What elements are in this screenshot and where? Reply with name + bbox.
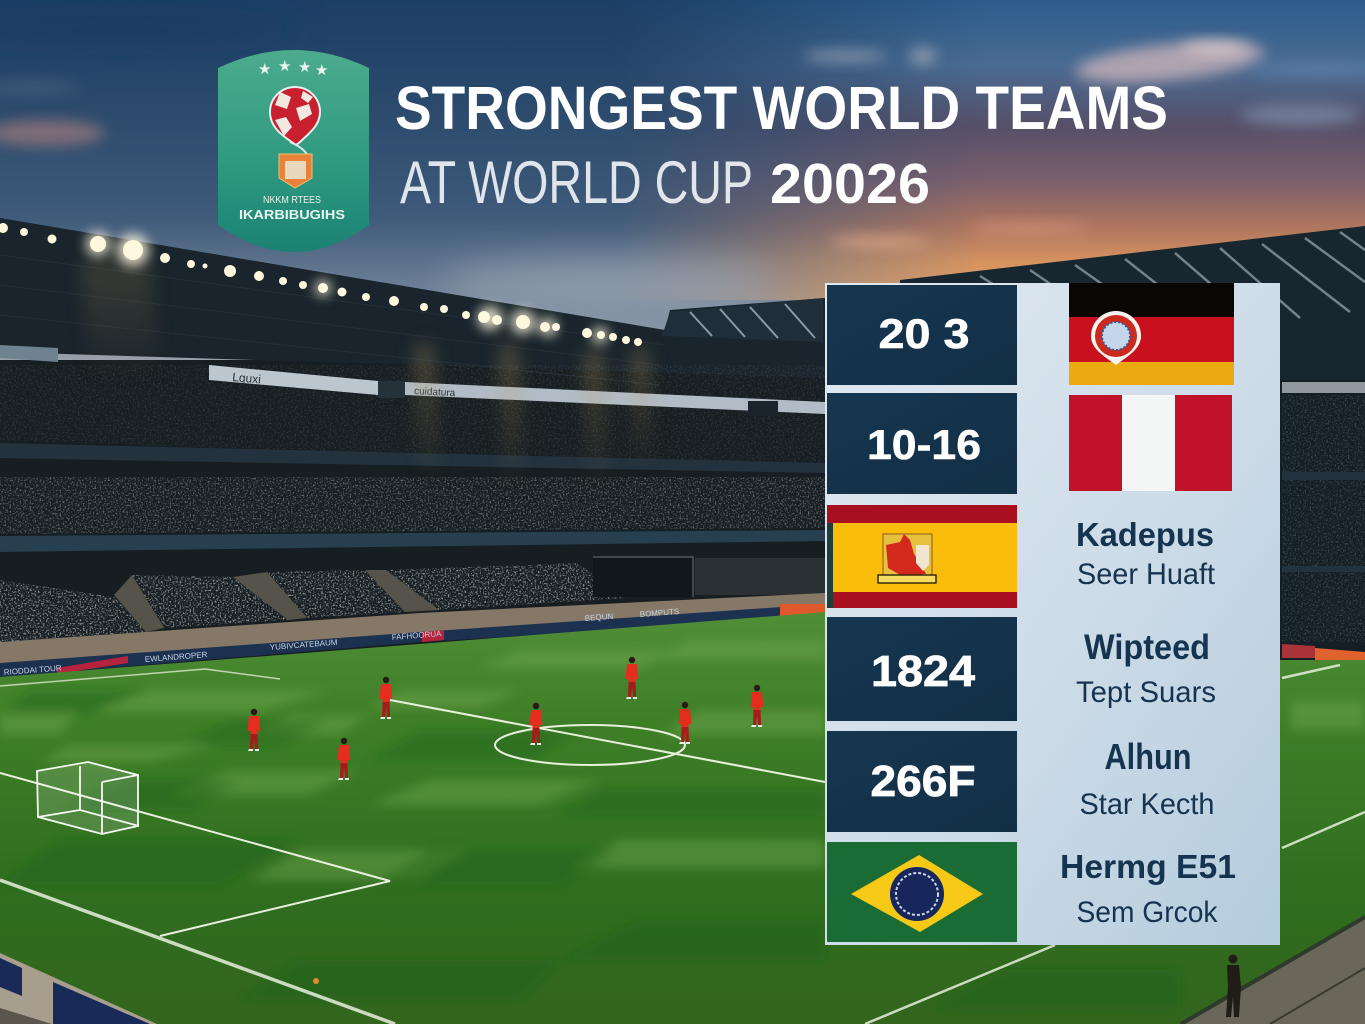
badge shield [279,154,312,188]
goal [37,762,139,834]
row 3 team: Seer Huaft [1077,558,1216,591]
row 6 team: Sem Grcok [1076,896,1218,929]
title: STRONGEST WORLD TEAMS [395,74,1168,142]
row 6 team [1060,848,1236,929]
stadium floodlights [0,223,642,346]
Spain crest [878,534,936,583]
title: 20026 [770,152,930,216]
row 4 score [827,617,1017,721]
badge caption: IKARBIBUGIHS [239,207,345,222]
pitch wall and advertising boards: FAFHOORUA [391,629,442,642]
row 5 team: Alhun [1104,736,1192,777]
light beams [80,260,650,490]
bottom left advertising boards [0,953,157,1024]
badge caption [239,195,345,222]
badge stars: ★ [278,58,291,75]
row 1 flag: Germany [1069,283,1234,385]
ball [313,978,319,984]
row 4 score: 1824 [871,647,976,696]
row 5 score: 266F [870,757,976,806]
panel: team table [825,283,1280,945]
stadium upper stand and crowd [0,218,1365,680]
upper stand banners: Lquxi [232,370,262,386]
row 5 score [827,731,1017,832]
badge stars [258,58,328,79]
badge stars: ★ [315,62,328,79]
upper stand banners: cuidatura [414,386,456,399]
badge football emblem [270,87,320,156]
row 2 flag: red white red [1069,395,1232,491]
row 4 team [1076,628,1216,709]
logo badge [218,50,369,252]
row 6 flag: Brazil [827,842,1017,942]
badge stars: ★ [258,61,271,78]
badge stars: ★ [298,59,311,76]
pitch wall and advertising boards: EWLANDROPER [144,650,208,664]
football pitch [0,600,1365,1024]
row 3 team: Kadepus [1076,516,1214,553]
row 3 flag: Spain [827,505,1017,608]
row 4 team: Tept Suars [1076,676,1216,709]
pitch wall and advertising boards [0,593,1365,677]
pitch wall and advertising boards: BOMPUTS [639,607,680,619]
row 2 score [827,393,1017,494]
title: AT WORLD CUP [400,149,753,216]
title [395,74,1168,216]
row 3 team [1076,516,1216,591]
bottom right walkway and official [1181,917,1365,1024]
pitch wall and advertising boards: RIODDAI TOUR [3,663,62,677]
row 5 team: Star Kecth [1080,788,1214,821]
row 5 team [1080,736,1214,821]
row 4 team: Wipteed [1084,628,1210,667]
players [248,657,764,780]
row 2 score: 10-16 [867,421,981,468]
pitch markings [0,665,1365,1024]
row 6 team: Hermg E51 [1060,848,1236,885]
badge caption: NKKM RTEES [263,195,321,206]
upper stand banners [209,365,825,416]
row 1 score: 20 3 [878,310,970,357]
row 1 score [827,285,1017,385]
background: evening sky [0,0,1365,360]
pitch wall and advertising boards: YUBIVCATEBAUM [269,638,338,652]
pitch wall and advertising boards: BEQUN [584,612,614,623]
